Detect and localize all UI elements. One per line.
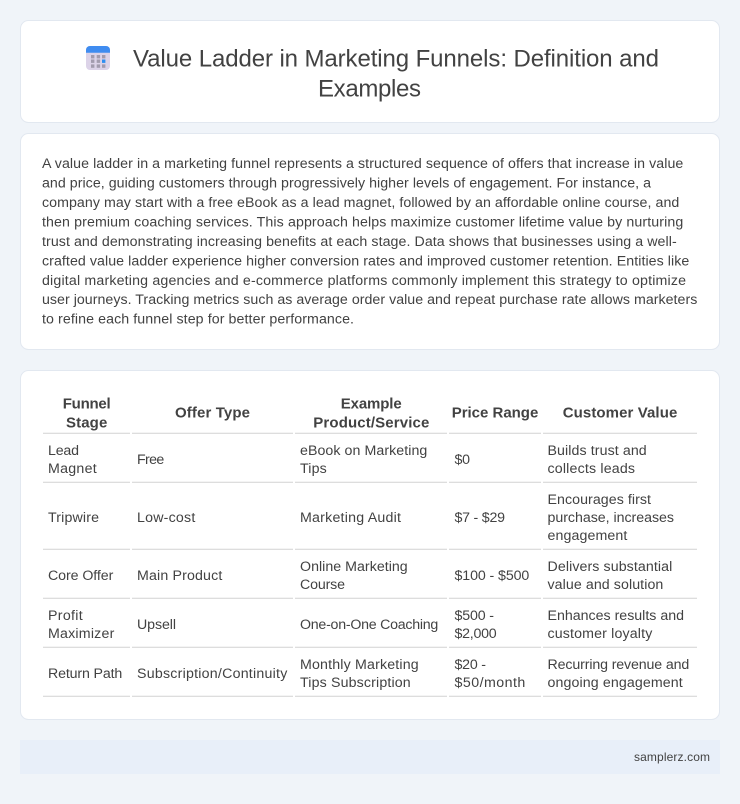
row: tripwire — [48, 492, 674, 544]
description text — [42, 156, 697, 328]
panel: description — [20, 134, 720, 350]
description text: and price, guiding customers through progressively higher levels of engagement. For instance, a — [42, 176, 651, 192]
table header row — [63, 396, 677, 431]
row: profit maximizer: Upsell — [137, 617, 176, 633]
row: lead magnet: Lead — [48, 443, 79, 459]
row: return path: Tips Subscription — [300, 675, 411, 691]
row: core offer: Main Product — [137, 568, 222, 584]
panel: value ladder table — [20, 370, 720, 720]
row: core offer: Delivers substantial — [548, 559, 672, 575]
row: return path: $20 - — [454, 657, 486, 673]
row: core offer: value and solution — [548, 577, 663, 593]
row: profit maximizer: One-on-One Coaching — [300, 617, 438, 633]
row: core offer — [48, 559, 672, 593]
row: return path — [48, 657, 689, 691]
row: return path: $50/month — [454, 675, 525, 691]
row: profit maximizer: $500 - — [454, 608, 494, 624]
row: return path: Return Path — [48, 666, 122, 682]
table header row: Customer Value — [563, 404, 677, 421]
row: core offer: Online Marketing — [300, 559, 408, 575]
row: profit maximizer: Profit — [48, 608, 83, 624]
icon: calendar — [86, 46, 110, 70]
description text: crafted value ladder experience higher conversion rates and improved customer retention. Entities like — [42, 253, 689, 269]
row: return path: Monthly Marketing — [300, 657, 419, 673]
row: return path: Recurring revenue and — [548, 657, 689, 673]
row: profit maximizer — [48, 608, 684, 642]
row: tripwire: $7 - $29 — [454, 510, 505, 526]
row: lead magnet: collects leads — [548, 461, 635, 477]
row: tripwire: Encourages first — [548, 492, 651, 508]
footer credit: samplerz.com — [634, 750, 710, 764]
table header row: Product/Service — [313, 414, 429, 431]
row: profit maximizer: Enhances results and — [548, 608, 684, 624]
row: lead magnet: Free — [137, 452, 164, 468]
row: lead magnet: Tips — [300, 461, 327, 477]
title: Value Ladder in Marketing Funnels: Definition and — [133, 45, 659, 72]
row: lead magnet: eBook on Marketing — [300, 443, 427, 459]
row: return path: Subscription/Continuity — [137, 666, 288, 682]
row: core offer: $100 - $500 — [454, 568, 529, 584]
table header row: Funnel — [63, 396, 111, 413]
title: Examples — [318, 75, 421, 102]
row: return path: ongoing engagement — [548, 675, 683, 691]
row: profit maximizer: Maximizer — [48, 626, 115, 642]
row: core offer: Core Offer — [48, 568, 114, 584]
row: lead magnet: Builds trust and — [548, 443, 647, 459]
row: core offer: Course — [300, 577, 345, 593]
row: profit maximizer: $2,000 — [454, 626, 497, 642]
description text: then premium coaching services. This approach helps maximize customer lifetime value by nurturing — [42, 214, 683, 230]
description text: to refine each funnel step for better performance. — [42, 312, 354, 328]
row: lead magnet: $0 — [454, 452, 470, 468]
panel: title header — [20, 20, 720, 122]
row: lead magnet — [48, 443, 647, 477]
row: tripwire: Marketing Audit — [300, 510, 401, 526]
row: tripwire: purchase, increases — [548, 510, 674, 526]
row: lead magnet: Magnet — [48, 461, 97, 477]
table header row: Stage — [66, 414, 107, 431]
table header row: Offer Type — [175, 405, 250, 422]
title — [133, 45, 659, 102]
footer bar — [20, 740, 720, 774]
description text: A value ladder in a marketing funnel represents a structured sequence of offers that increase in value — [42, 156, 683, 172]
description text: user journeys. Tracking metrics such as average order value and repeat purchase rate allows marketers — [42, 292, 697, 308]
row: profit maximizer: customer loyalty — [548, 626, 653, 642]
table header row: Price Range — [452, 404, 538, 421]
description text: trust and demonstrating increasing benefits at each stage. Data shows that businesses using a well- — [42, 234, 677, 250]
table header row: Example — [341, 396, 402, 413]
row: tripwire: Low-cost — [137, 510, 195, 526]
row: tripwire: engagement — [548, 528, 627, 544]
description text: digital marketing agencies and e-commerce platforms commonly implement this strategy to optimize — [42, 273, 686, 289]
description text: company may start with a free eBook as a lead magnet, followed by an affordable online course, and — [42, 195, 679, 211]
row: tripwire: Tripwire — [48, 510, 99, 526]
